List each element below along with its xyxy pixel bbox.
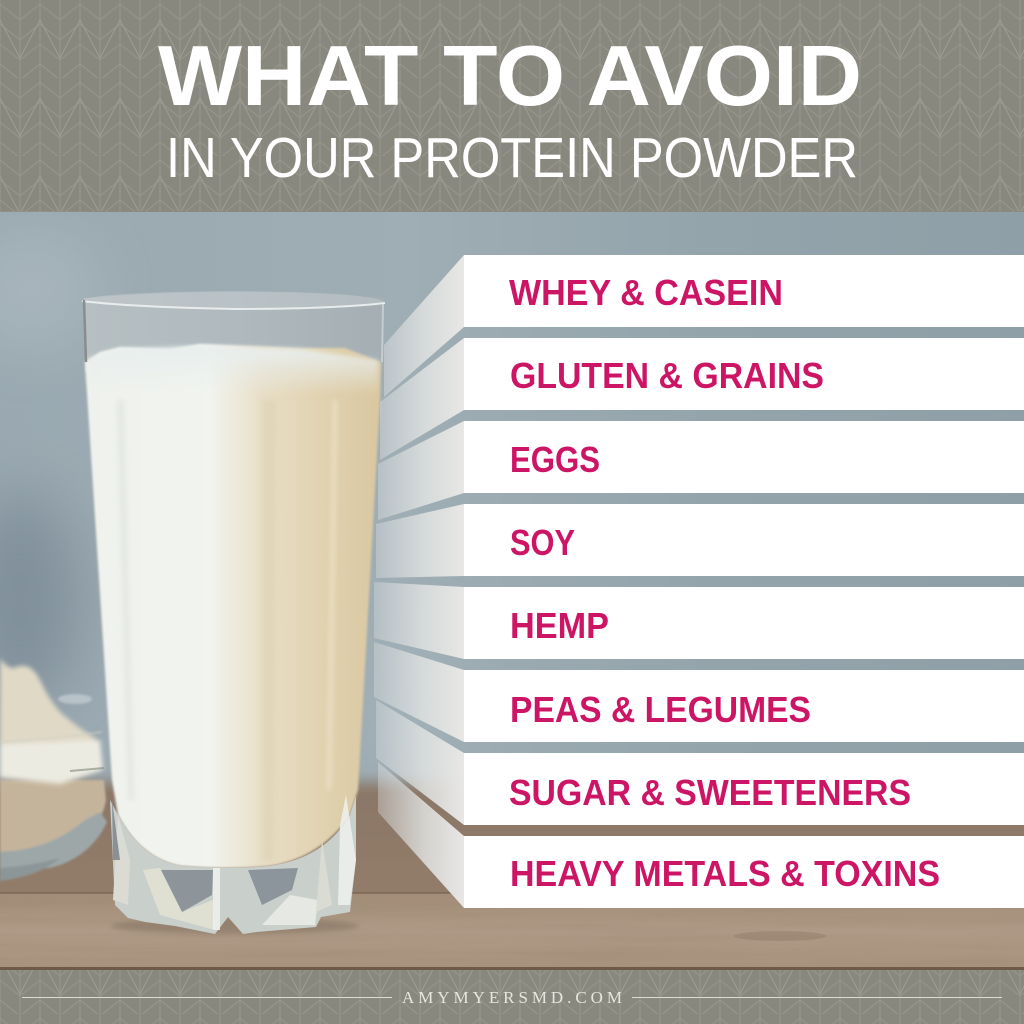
cut-glass base [110,796,356,934]
bar: peas and legumes: PEAS & LEGUMES [510,689,811,730]
bar: heavy metals and toxins: HEAVY METALS & TOXINS [510,853,940,894]
bar: whey and casein [464,255,1024,327]
footer website: AMYMYERSMD.COM [402,988,622,1007]
bar: soy: SOY [510,522,575,563]
bar: soy [464,504,1024,576]
milk foam [88,346,378,395]
bar: sugar and sweeteners [464,753,1024,825]
bar: eggs: EGGS [510,439,600,480]
glass rim [82,291,385,309]
glass of protein shake [82,291,385,934]
glass shadow [111,918,359,934]
bar: heavy metals and toxins [464,836,1024,908]
bar: hemp [464,587,1024,659]
photo background: wooden table [0,782,1024,970]
bar: sugar and sweeteners: SUGAR & SWEETENERS [509,772,911,813]
side faces of the bars in perspective [374,255,464,908]
bowl of protein powder [0,658,107,881]
subtitle: IN YOUR PROTEIN POWDER [166,126,858,190]
bar: gluten and grains [464,338,1024,410]
title: WHAT TO AVOID [158,29,862,124]
milk liquid [85,344,381,868]
bar: whey and casein: WHEY & CASEIN [509,272,783,313]
bar: eggs [464,421,1024,493]
bar: gluten and grains: GLUTEN & GRAINS [510,355,824,396]
bar: hemp: HEMP [510,605,609,646]
bar: peas and legumes [464,670,1024,742]
header band with leaf pattern [0,0,1024,211]
photo background: wall [0,212,1024,792]
liquid streaks [117,400,338,860]
footer band with leaf pattern [0,970,1024,1024]
empty upper glass [84,292,384,372]
